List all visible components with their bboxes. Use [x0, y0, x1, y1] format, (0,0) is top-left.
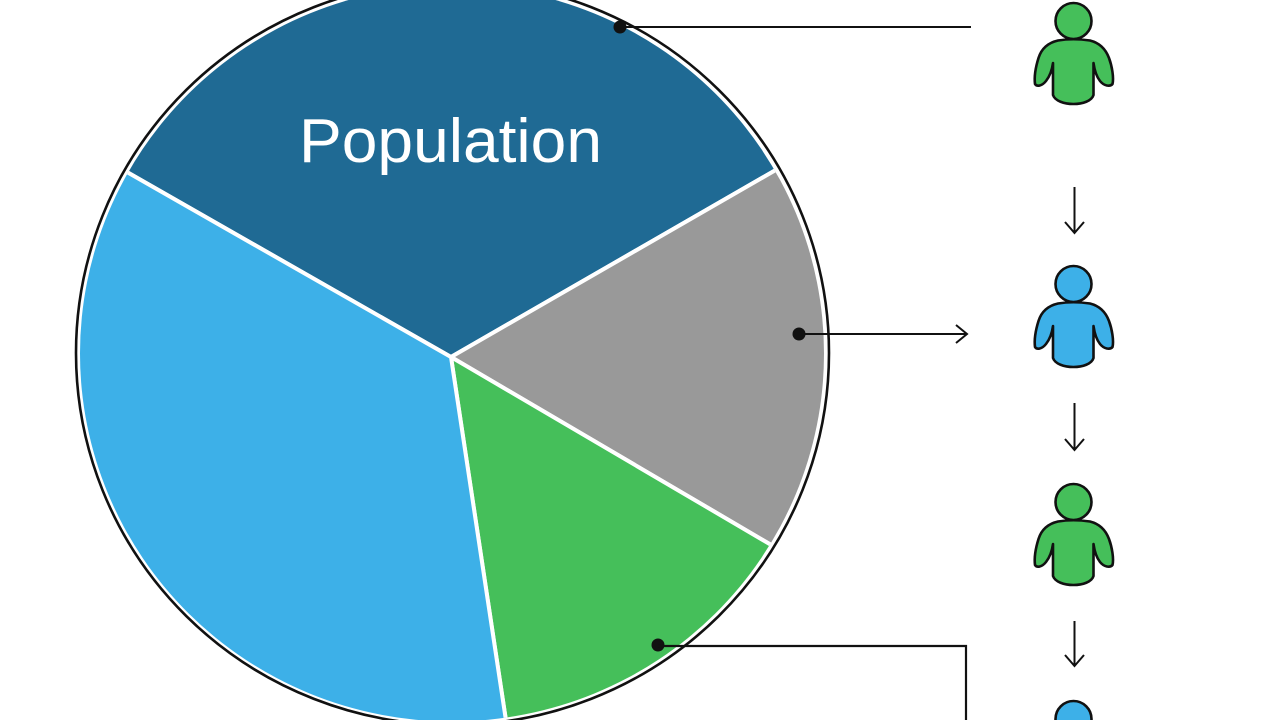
slice: light blue	[80, 171, 508, 720]
arrow down 3	[1065, 621, 1084, 666]
person icon: blue 2	[1035, 266, 1113, 367]
slice: green	[454, 357, 771, 718]
person icon: blue 4	[1035, 701, 1113, 720]
connector: dark blue slice to person 1	[614, 20, 971, 34]
pie chart: population	[80, 0, 824, 720]
outer ring	[76, 0, 829, 720]
slice: dark blue	[128, 0, 775, 354]
person icon: green 3	[1035, 484, 1113, 585]
slice: grey	[451, 169, 824, 544]
arrow down 2	[1065, 403, 1084, 450]
connector arrow: grey slice to person 2	[792, 325, 967, 343]
person icon: green 1	[1035, 3, 1113, 104]
connector: green slice to person 4	[652, 638, 966, 720]
label: Population: Population	[299, 107, 602, 176]
arrow down 1	[1065, 187, 1084, 233]
